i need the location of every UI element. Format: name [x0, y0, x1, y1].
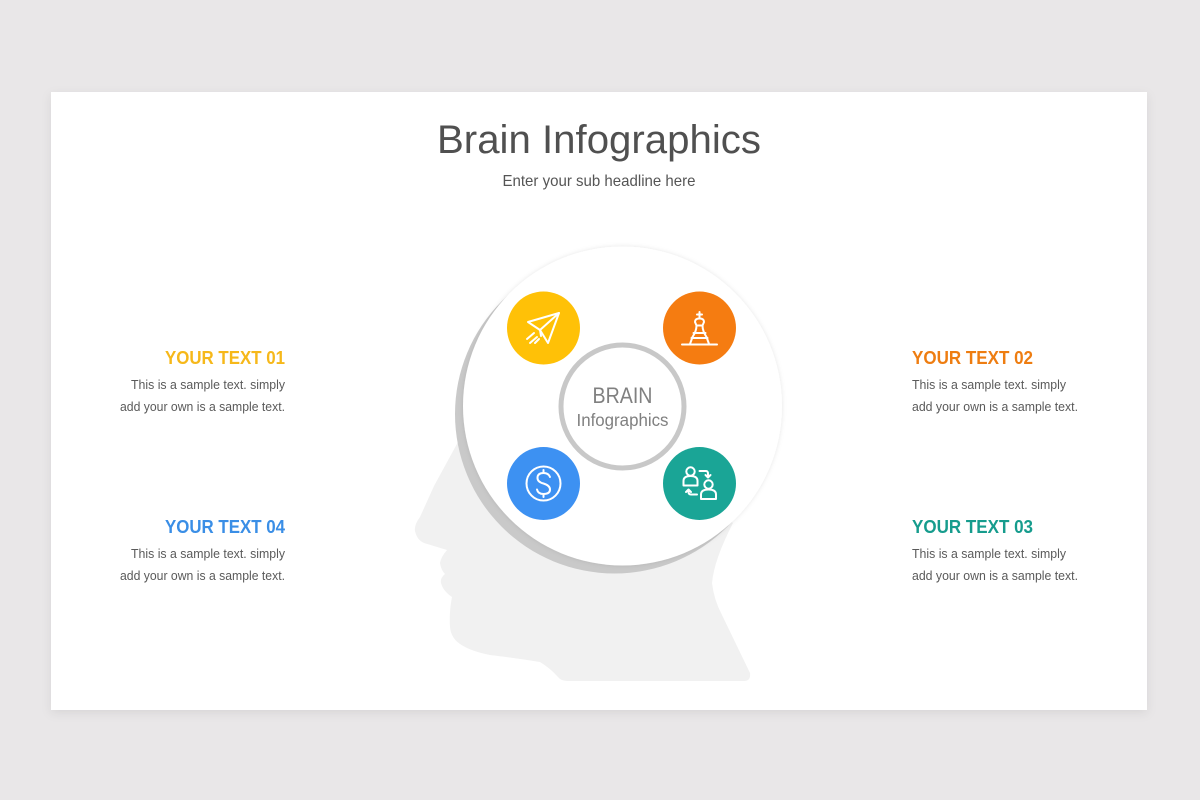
- text block 03: This is a sample text. simply: [912, 547, 1067, 561]
- center label: Infographics: Infographics: [576, 410, 669, 430]
- white main disc: [463, 246, 782, 566]
- text block 04: YOUR TEXT 04: [165, 517, 285, 537]
- text block 02: add your own is a sample text.: [912, 400, 1078, 414]
- text block 01: This is a sample text. simply: [131, 378, 286, 392]
- panel: white slide card: [51, 92, 1147, 710]
- icon: dollar coin on blue circle: [507, 447, 580, 520]
- icon: paper plane on yellow circle: [507, 292, 580, 364]
- text block 03: [912, 517, 1078, 583]
- title: Brain Infographics: [437, 118, 761, 162]
- text block 01: YOUR TEXT 01: [165, 348, 285, 368]
- text block 01: add your own is a sample text.: [120, 400, 285, 414]
- text block 03: add your own is a sample text.: [912, 569, 1078, 583]
- text block 02: YOUR TEXT 02: [912, 348, 1033, 368]
- gray disc behind: [455, 254, 774, 574]
- head silhouette: [415, 420, 750, 681]
- text block 04: add your own is a sample text.: [120, 569, 285, 583]
- center ring with label: [561, 345, 684, 468]
- subtitle: Enter your sub headline here: [502, 173, 696, 190]
- text block 03: YOUR TEXT 03: [912, 517, 1033, 537]
- text block 01: [120, 348, 286, 414]
- text block 04: This is a sample text. simply: [131, 547, 286, 561]
- text block 04: [120, 517, 286, 583]
- icon: people exchange on teal circle: [663, 447, 736, 520]
- center label: BRAIN: BRAIN: [592, 383, 652, 408]
- icon: chess king on orange circle: [663, 292, 736, 364]
- text block 02: [912, 348, 1078, 414]
- text block 02: This is a sample text. simply: [912, 378, 1067, 392]
